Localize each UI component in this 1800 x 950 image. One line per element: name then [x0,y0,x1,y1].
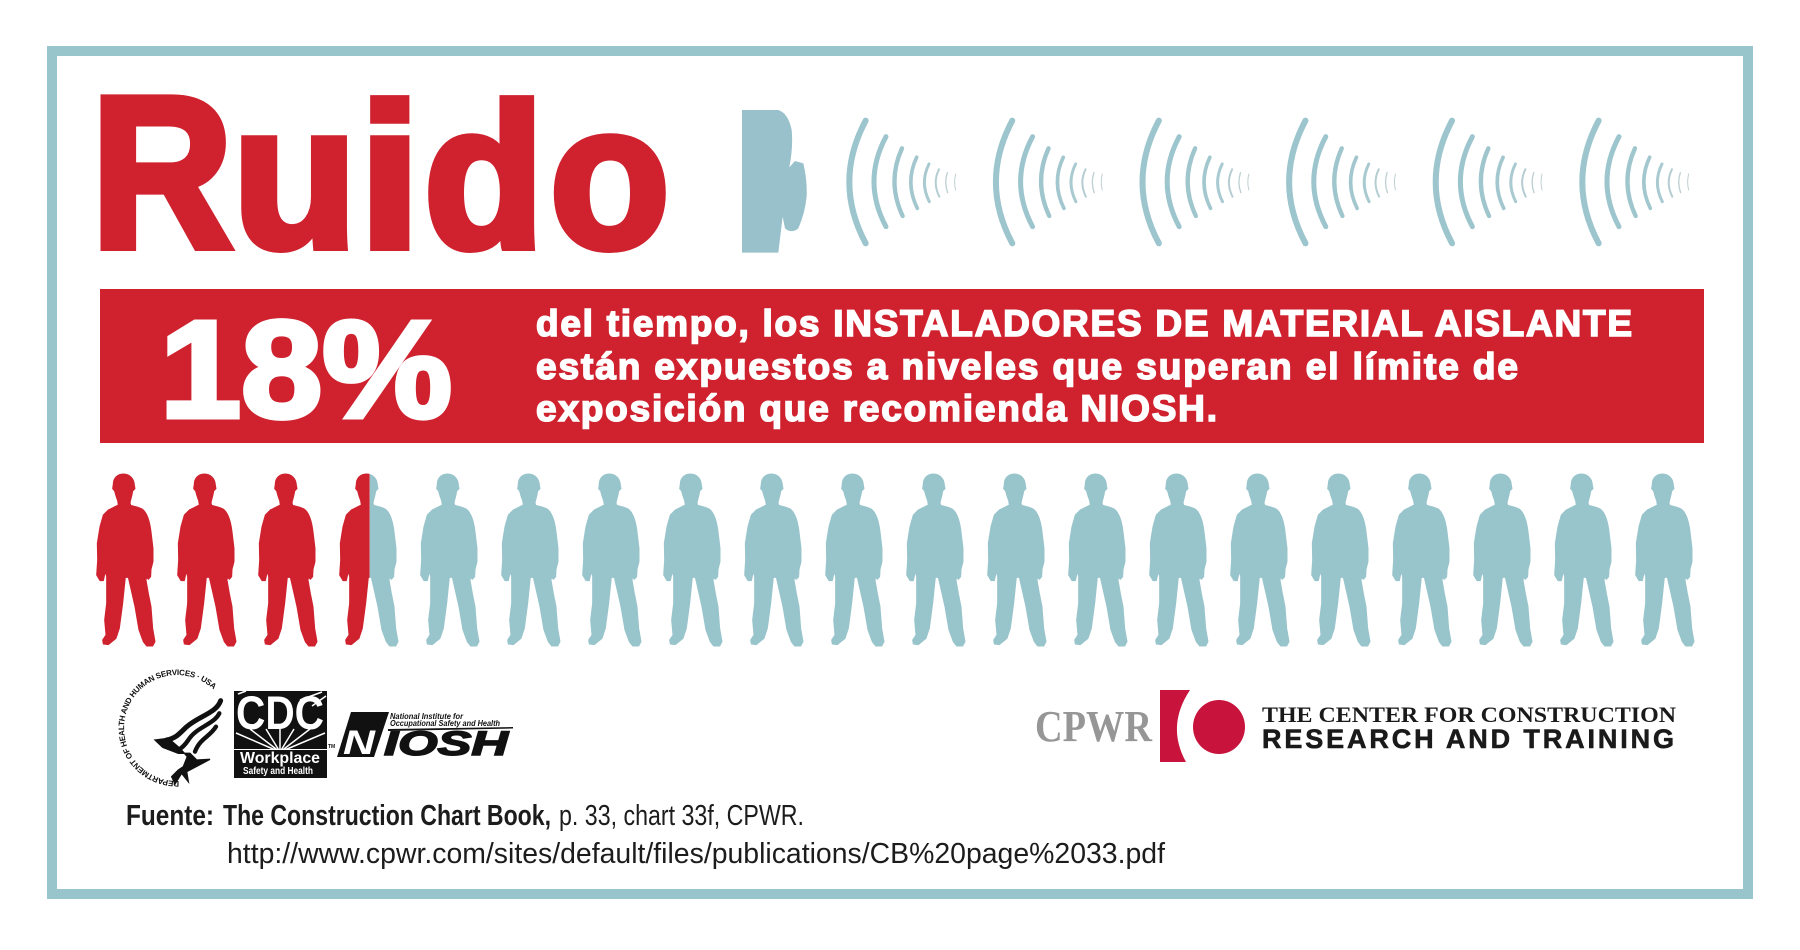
logo: NIOSH: IOSH [384,725,510,763]
title: u [233,63,357,291]
exposed workers [97,474,398,646]
logo: CDC Workplace Safety and Health: Safety and Health [243,766,313,777]
logo: CDC Workplace Safety and Health [234,686,335,778]
title: i [359,63,421,291]
icon: ear [742,110,807,253]
title [91,51,670,293]
pictogram row: 18 percent of 20 workers [97,474,1694,646]
red circle [1193,700,1245,754]
unexposed workers [340,474,1694,646]
logo: CDC Workplace Safety and Health: Workplace [240,750,320,767]
source citation: The Construction Chart Book, [223,800,551,832]
statement text: están expuestos a niveles que superan el límite de [536,346,1518,387]
big number: 18% [160,293,452,447]
statement text: exposición que recomienda NIOSH. [536,388,1217,429]
source citation: p. 33, chart 33f, CPWR. [559,800,804,832]
panel: statistic band [100,289,1704,447]
logo: NIOSH: National Institute for [390,712,464,721]
logo: CPWR [1035,690,1676,762]
logo: CPWR: RESEARCH AND TRAINING [1262,724,1674,754]
source citation [126,800,1166,870]
logo: CDC Workplace Safety and Health: CDC [236,686,324,739]
source citation: Fuente: [126,800,214,832]
logo: NIOSH [337,712,513,763]
CPWR wordmark: CPWR [1035,702,1153,751]
logo: CDC Workplace Safety and Health: TM [328,744,335,750]
title: o [550,63,670,291]
icon: sound waves [849,121,1689,243]
logo: HHS: DEPARTMENT OF HEALTH AND HUMAN SERVICES · USA [118,670,216,787]
organisation name: THE CENTER FOR CONSTRUCTION [1262,702,1676,727]
title: d [424,63,544,291]
logo: NIOSH: Occupational Safety and Health [390,719,500,728]
statement text [536,303,1632,429]
red bracket [1160,690,1190,762]
statement text: del tiempo, los INSTALADORES DE MATERIAL AISLANTE [536,303,1632,344]
source citation: http://www.cpwr.com/sites/default/files/publications/CB%20page%2033.pdf [227,838,1166,870]
logo: NIOSH: N [343,724,377,762]
band background [100,289,1704,443]
title: R [91,51,233,293]
